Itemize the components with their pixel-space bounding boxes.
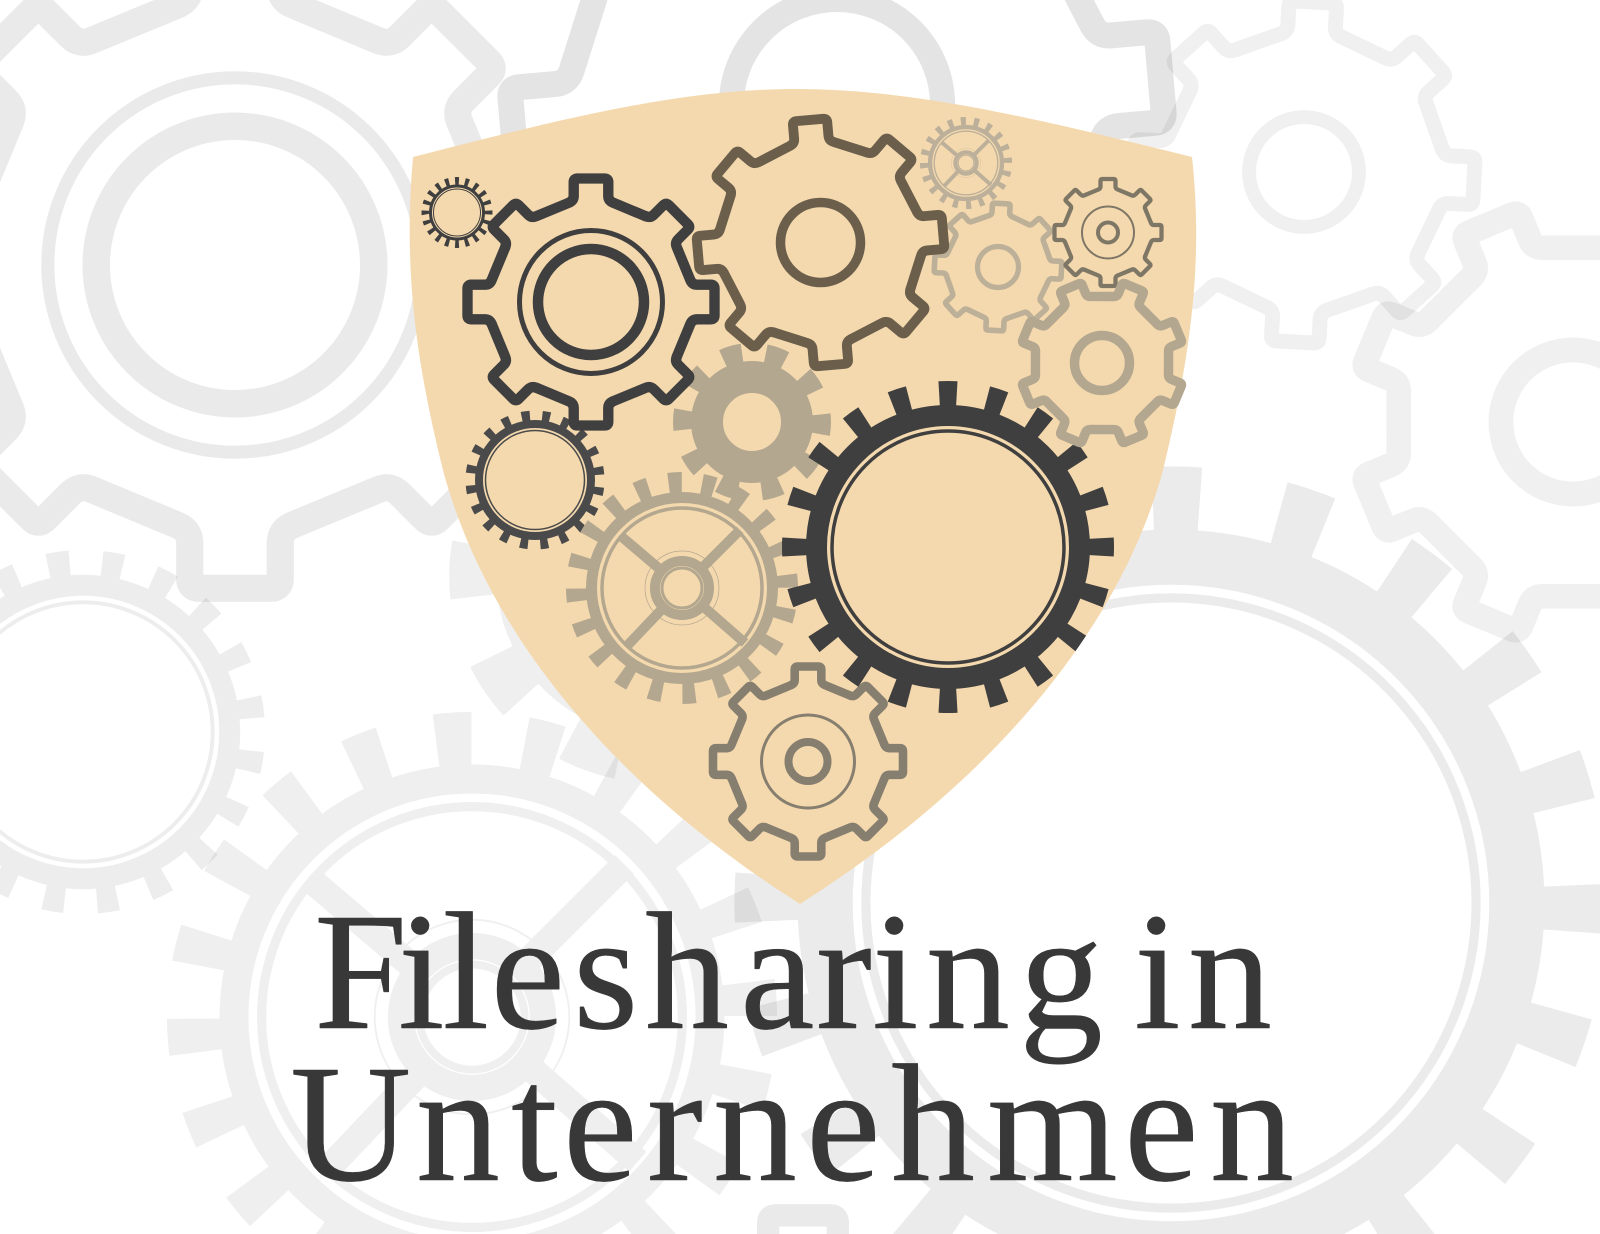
gear: tiny dark bbox=[424, 180, 490, 245]
shield shape bbox=[410, 89, 1196, 904]
gear: pale outline right bbox=[930, 199, 1066, 335]
background gear: top right bbox=[1121, 0, 1487, 355]
gear: small pale spoked bbox=[919, 116, 1013, 210]
background gear: left edge bbox=[0, 537, 278, 927]
title bbox=[290, 879, 1294, 1217]
title line 1: Filesharing in bbox=[314, 879, 1272, 1065]
background gear: large top left bbox=[0, 0, 565, 595]
gear: small dark toothed bbox=[461, 406, 609, 554]
background gear: right edge bbox=[1286, 135, 1600, 709]
title line 2: Unternehmen bbox=[290, 1031, 1294, 1217]
gear: large dark main bbox=[788, 387, 1108, 707]
background gear: solid behind shield bbox=[445, 365, 867, 787]
background gear: spoked bottom centre bbox=[164, 709, 780, 1234]
gear: grey outline bottom bbox=[711, 664, 905, 859]
background gear: bottom edge bbox=[549, 1210, 1057, 1234]
gear: dark outline bbox=[465, 176, 717, 428]
gear: solid tan bbox=[672, 342, 832, 502]
gear: large tan spoked bbox=[565, 471, 799, 705]
shield emblem with gears bbox=[410, 89, 1211, 904]
gear: brown outline bbox=[684, 106, 957, 379]
gear cluster bbox=[424, 106, 1211, 859]
background gear: top centre bbox=[478, 0, 1196, 464]
gear: tan outline right bbox=[993, 254, 1211, 472]
background gear: large bottom right bbox=[743, 475, 1599, 1234]
gear: small grey top right bbox=[1053, 178, 1163, 287]
